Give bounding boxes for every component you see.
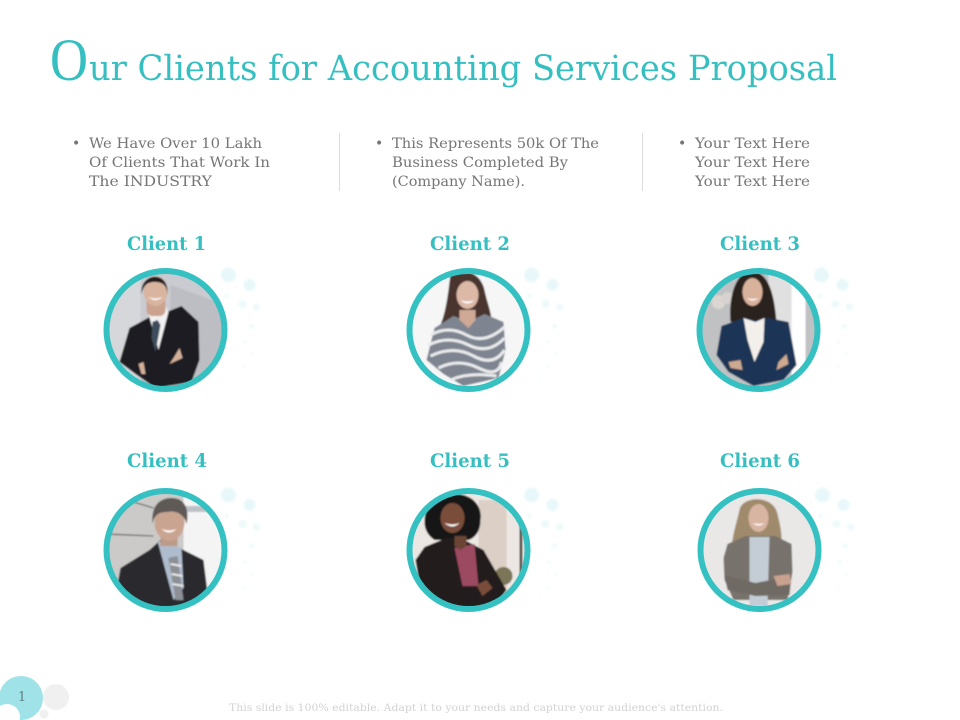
text block: bullet 3: Your Text Here	[694, 136, 810, 152]
panel: client 4	[106, 450, 260, 610]
photo: client 5	[408, 488, 563, 610]
title: ur Clients for Accounting Services Proposal	[89, 49, 837, 89]
photo: client 3	[698, 268, 853, 390]
text block: bullet 1: The INDUSTRY	[89, 174, 213, 190]
text block: bullet 1	[72, 136, 270, 190]
footer note: This slide is 100% editable. Adapt it to your needs and capture your audience's attention.	[229, 702, 723, 714]
photo: client 4	[106, 488, 260, 610]
panel: client 5	[408, 450, 563, 610]
photo: client 1	[106, 268, 260, 390]
text block: bullet 2: Business Completed By	[392, 155, 568, 171]
heading: client 4: Client 4	[127, 450, 207, 472]
text block: bullet 3: Your Text Here	[694, 174, 810, 190]
text block: bullet 3: Your Text Here	[694, 155, 810, 171]
panel: client 2	[408, 233, 563, 390]
heading: client 6: Client 6	[720, 450, 800, 472]
text block: bullet 3: •	[678, 136, 686, 152]
text block: bullet 2: This Represents 50k Of The	[392, 136, 599, 152]
panel: client 1	[106, 233, 260, 390]
page number: 1	[18, 690, 26, 705]
text block: bullet 2: (Company Name).	[392, 174, 525, 190]
photo: client 6	[700, 488, 854, 610]
photo: client 2	[408, 268, 563, 390]
heading: client 3: Client 3	[720, 233, 800, 255]
heading: client 2: Client 2	[430, 233, 510, 255]
text block: bullet 3	[678, 136, 810, 190]
panel: client 6	[700, 450, 854, 610]
text block: bullet 2	[375, 136, 599, 190]
text block: bullet 1: •	[72, 136, 80, 152]
text block: bullet 1: Of Clients That Work In	[89, 155, 270, 171]
text block: bullet 2: •	[375, 136, 383, 152]
heading: client 1: Client 1	[127, 233, 206, 255]
page number badge	[0, 676, 69, 720]
panel: client 3	[698, 233, 853, 390]
heading: client 5: Client 5	[430, 450, 510, 472]
text block: bullet 1: We Have Over 10 Lakh	[89, 136, 262, 152]
title: O	[50, 27, 88, 93]
